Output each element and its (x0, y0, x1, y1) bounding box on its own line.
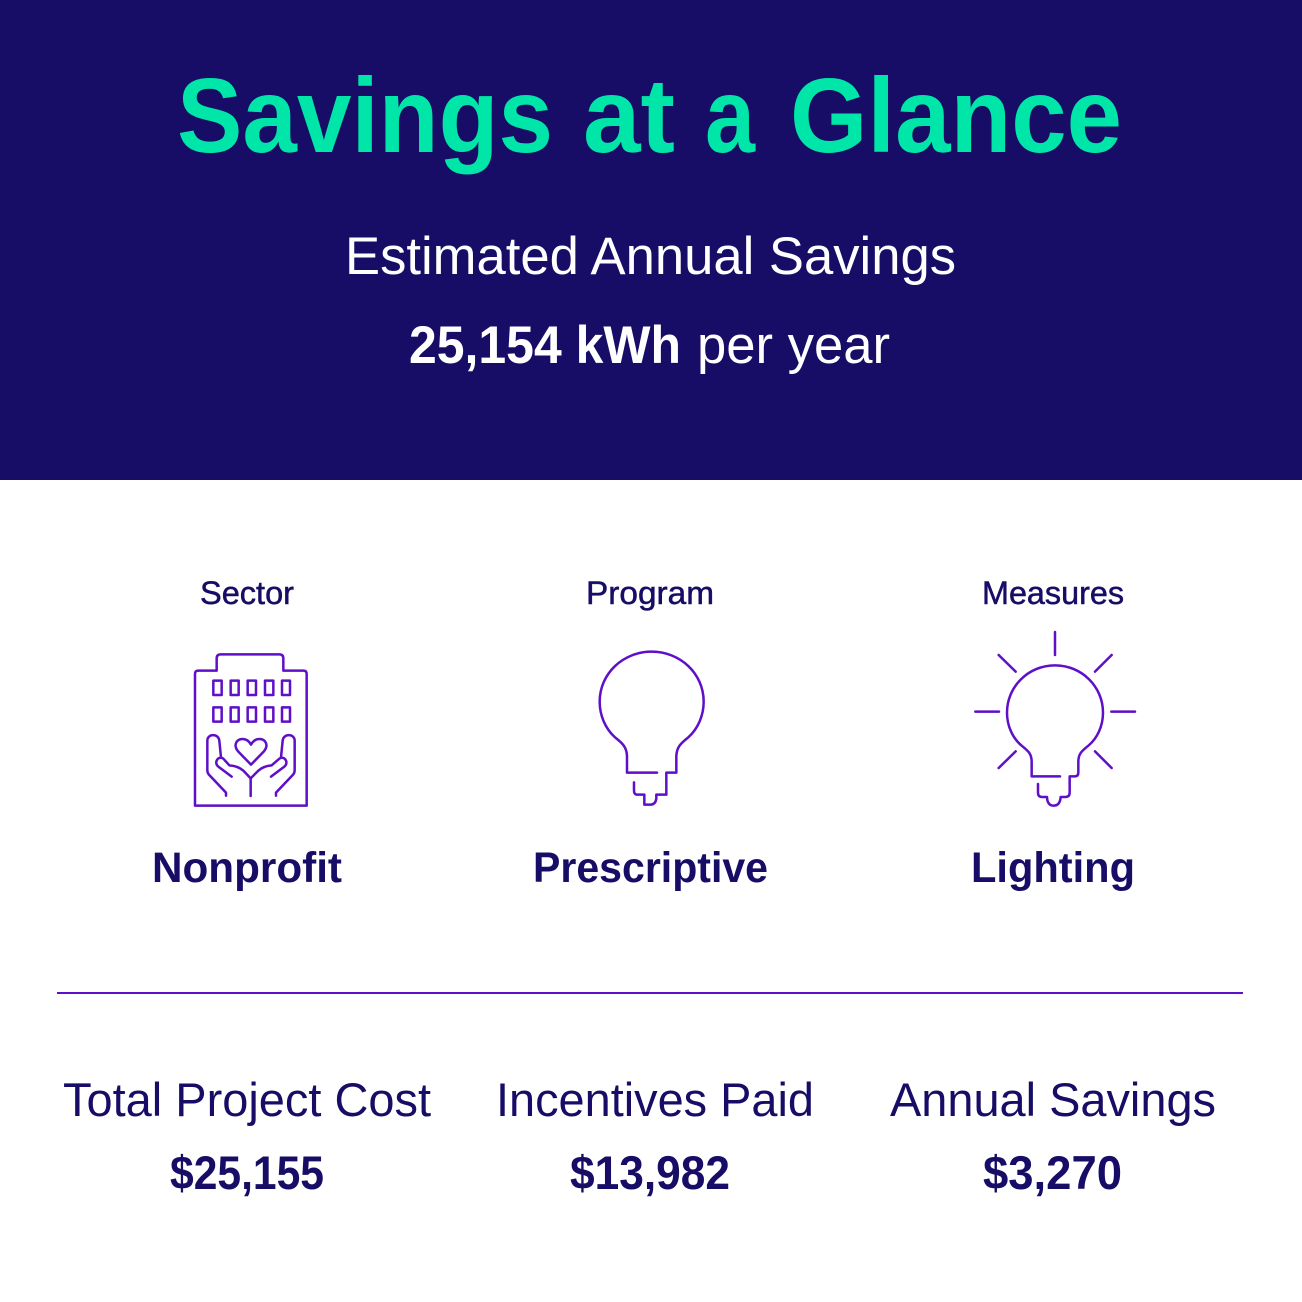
annual savings figure: 25,154 kWh (409, 316, 681, 375)
stat: incentives paid: $13,982 (570, 1146, 730, 1199)
title: at (583, 57, 675, 175)
header panel (0, 0, 1302, 480)
stat: total project cost (63, 1073, 431, 1199)
annual savings figure: per year (697, 316, 890, 375)
sector label: Sector (200, 575, 294, 611)
stat: incentives paid (496, 1073, 814, 1199)
column: program (533, 575, 768, 892)
title: Glance (790, 57, 1122, 175)
stat: total project cost: $25,155 (170, 1146, 324, 1199)
title: a (705, 57, 756, 175)
column: sector (152, 575, 342, 892)
title (177, 57, 1122, 175)
stat: total project cost: Total Project Cost (63, 1073, 431, 1126)
measures label: Measures (982, 575, 1124, 611)
column: measures (971, 575, 1135, 892)
stat: incentives paid: Incentives Paid (496, 1073, 814, 1126)
icon: lit light bulb (975, 632, 1135, 806)
program value: Prescriptive (533, 844, 768, 892)
stat: annual savings: Annual Savings (890, 1073, 1216, 1126)
icon: building with hands and heart (195, 654, 307, 806)
measures value: Lighting (971, 844, 1135, 892)
stat: annual savings (890, 1073, 1216, 1199)
icon: light bulb (600, 652, 704, 805)
program label: Program (586, 575, 714, 611)
annual savings figure (409, 316, 890, 375)
title: Savings (177, 57, 553, 175)
stat: annual savings: $3,270 (983, 1146, 1122, 1199)
sector value: Nonprofit (152, 844, 342, 892)
subtitle: Estimated Annual Savings (345, 227, 956, 286)
